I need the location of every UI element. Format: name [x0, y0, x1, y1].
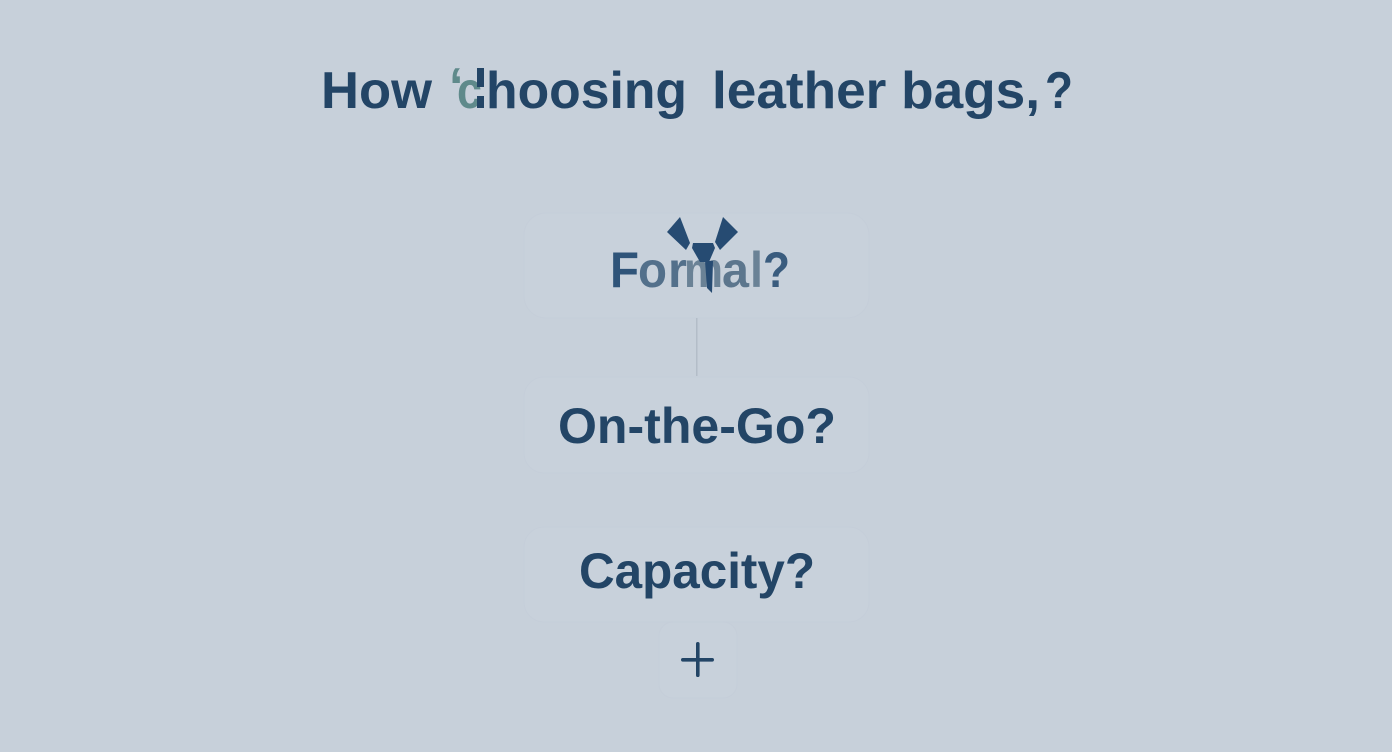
label: Formal?: r: [668, 242, 687, 298]
panel: Formal question: [524, 213, 869, 318]
label: Formal?: F: [610, 242, 639, 298]
label: On-the-Go?: On-the-Go?: [558, 398, 836, 454]
label: Formal?: m: [684, 242, 723, 298]
icon: necktie: [667, 217, 738, 293]
label: Formal?: o: [638, 242, 667, 298]
title: [321, 58, 1073, 120]
connector line: [696, 318, 698, 376]
title: hoosing: [486, 62, 687, 120]
panel: Capacity question: [524, 527, 869, 622]
icon: plus button: [659, 622, 737, 698]
label: Formal?: l: [750, 242, 763, 298]
label: Formal?: [610, 242, 790, 298]
label: Formal?: ?: [763, 242, 790, 298]
label: Formal?: a: [722, 242, 750, 298]
label: Capacity?: Capacity?: [579, 543, 815, 599]
title: How: [321, 62, 433, 120]
title: leather bags,: [712, 62, 1040, 120]
title: c: [457, 62, 482, 120]
title: ?: [1045, 62, 1073, 120]
panel: On-the-Go question: [524, 377, 869, 473]
title: ‘: [449, 58, 463, 116]
